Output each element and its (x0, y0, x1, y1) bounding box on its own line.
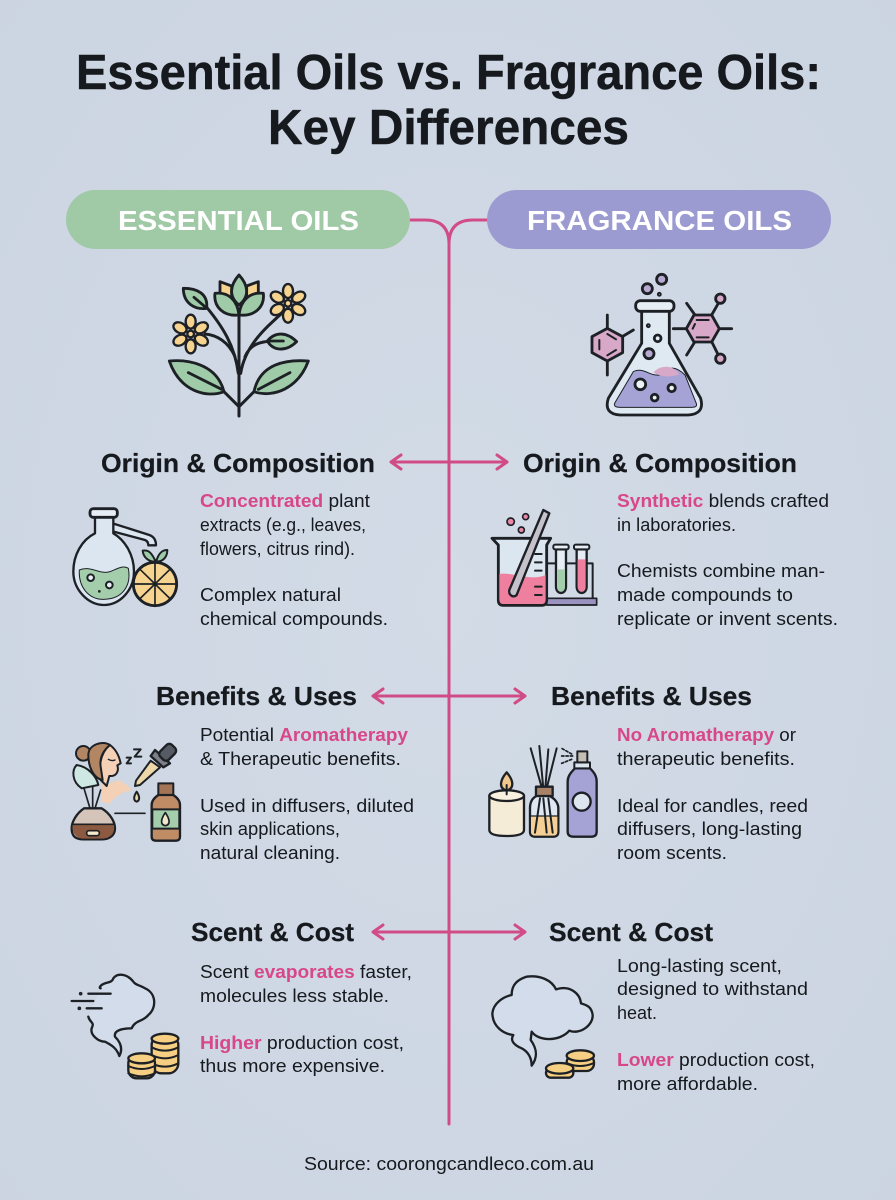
text block: Ideal for candles, reed (617, 796, 808, 816)
icon: flask and citrus (73, 509, 177, 606)
text block: extracts (e.g., leaves, (200, 515, 366, 535)
icon: conical flask with molecules (592, 274, 732, 415)
icon: beaker and test tubes (492, 510, 597, 605)
title (76, 46, 821, 155)
text block (617, 491, 838, 629)
text block: Higher production cost, (200, 1033, 404, 1053)
text block: Concentrated plant (200, 491, 370, 511)
title: Key Differences (268, 101, 629, 155)
arrow: benefits row (373, 689, 525, 703)
text block (200, 962, 412, 1076)
heading: Benefits & Uses (551, 681, 752, 711)
text block (200, 725, 414, 863)
text block: replicate or invent scents. (617, 609, 838, 629)
heading: Benefits & Uses (156, 681, 357, 711)
header pill: essential oils: ESSENTIAL OILS (118, 205, 359, 236)
text block: more affordable. (617, 1074, 758, 1094)
header pill: fragrance oils: FRAGRANCE OILS (527, 205, 792, 236)
icon: aromatherapy woman, diffuser and dropper (72, 742, 180, 841)
text block: thus more expensive. (200, 1056, 385, 1076)
text block: Used in diffusers, diluted (200, 796, 414, 816)
text block: therapeutic benefits. (617, 749, 795, 769)
source credit: Source: coorongcandleco.com.au (304, 1154, 594, 1174)
title: Essential Oils vs. Fragrance Oils: (76, 46, 821, 100)
heading: Scent & Cost (549, 917, 713, 947)
section: origin and composition, fragrance oils (492, 448, 838, 629)
text block: No Aromatherapy or (617, 725, 796, 745)
icon: plant with flowers (169, 275, 308, 416)
text block: Potential Aromatherapy (200, 725, 408, 745)
text block: Chemists combine man- (617, 561, 825, 581)
text block: in laboratories. (617, 515, 736, 535)
header pill: fragrance oils (487, 190, 831, 249)
text block: chemical compounds. (200, 609, 388, 629)
text block: & Therapeutic benefits. (200, 749, 401, 769)
text block: designed to withstand (617, 979, 808, 999)
header pill: essential oils (66, 190, 410, 249)
section: scent and cost, fragrance oils (492, 917, 815, 1094)
section: benefits and uses, essential oils (72, 681, 414, 863)
heading: Origin & Composition (101, 448, 375, 478)
section: benefits and uses, fragrance oils (489, 681, 808, 863)
text block: Synthetic blends crafted (617, 491, 829, 511)
text block: diffusers, long-lasting (617, 819, 802, 839)
arrow: scent row (373, 925, 525, 939)
text block (200, 491, 388, 629)
text block: made compounds to (617, 585, 793, 605)
text block: heat. (617, 1003, 657, 1023)
icon: candle, reed diffuser and spray (489, 746, 597, 837)
text block: Long-lasting scent, (617, 956, 782, 976)
text block: Complex natural (200, 585, 341, 605)
text block (617, 725, 808, 863)
heading: Scent & Cost (191, 917, 354, 947)
text block (617, 956, 815, 1094)
heading: Origin & Composition (523, 448, 797, 478)
central divider line (410, 220, 487, 1124)
text block: room scents. (617, 843, 727, 863)
text block: Scent evaporates faster, (200, 962, 412, 982)
arrow: origin row (391, 455, 507, 469)
section: scent and cost, essential oils (72, 917, 412, 1078)
text block: skin applications, (200, 819, 340, 839)
text block: natural cleaning. (200, 843, 340, 863)
icon: evaporating cloud and coins (72, 975, 178, 1078)
text block: molecules less stable. (200, 986, 389, 1006)
text block: flowers, citrus rind). (200, 539, 355, 559)
section: origin and composition, essential oils (73, 448, 388, 629)
icon: lingering cloud and coins (492, 976, 594, 1078)
text block: Lower production cost, (617, 1050, 815, 1070)
